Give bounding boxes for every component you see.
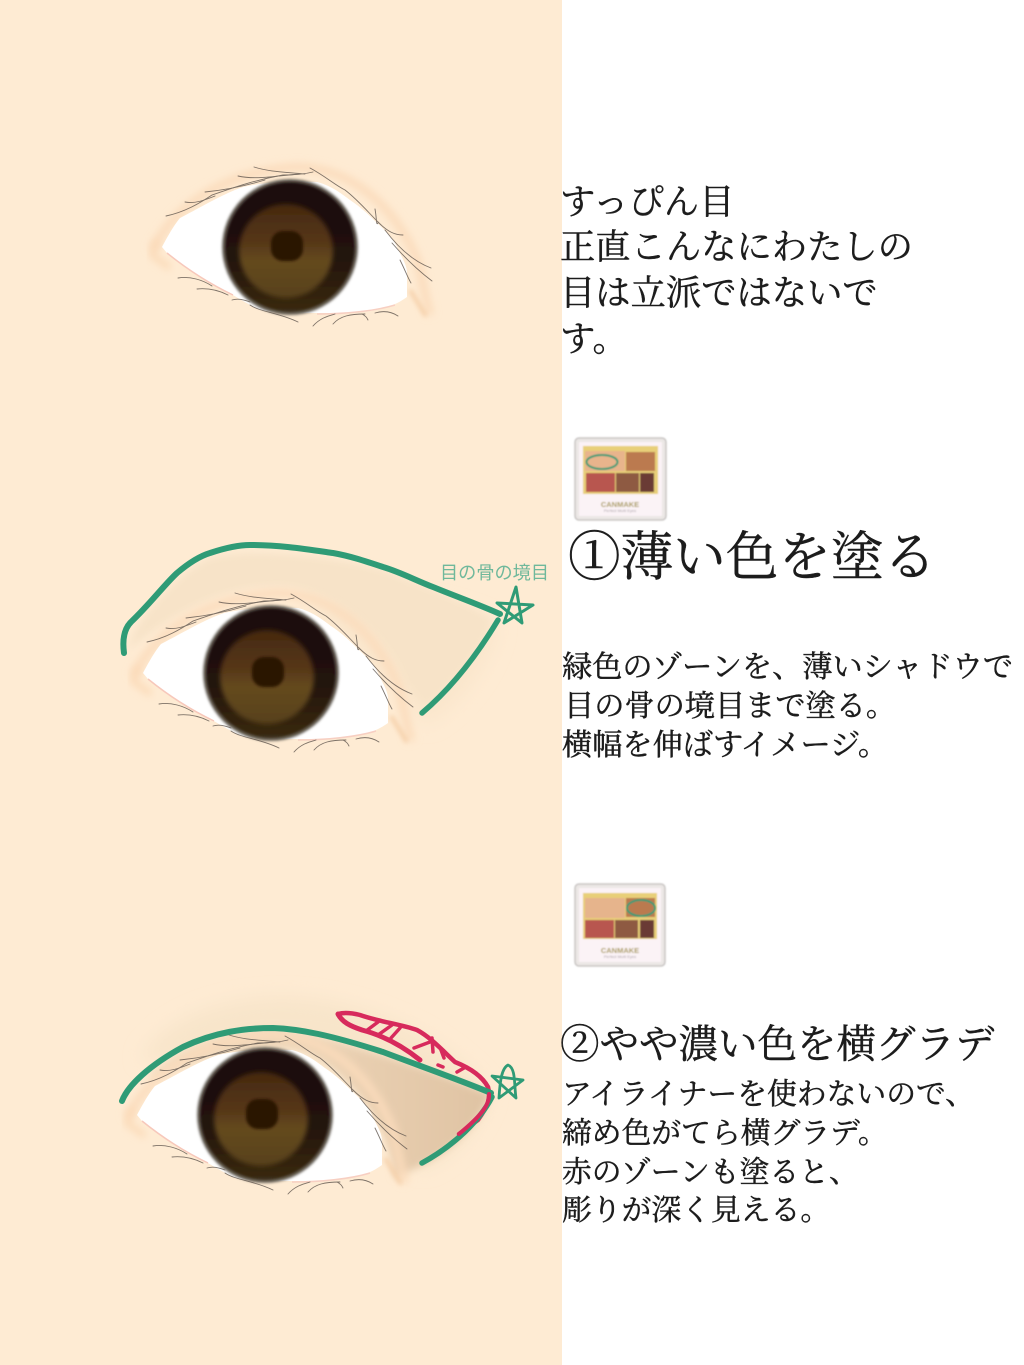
text block: bare eye description: すっぴん目 [560, 183, 734, 222]
green outline: outer lower [422, 1097, 492, 1163]
green circle mark [627, 900, 655, 916]
icon: green star [497, 587, 533, 623]
product name: Perfect Multi Eyes [604, 954, 636, 959]
shadow zone: pale halo [140, 997, 490, 1170]
product name: Perfect Multi Eyes [604, 508, 636, 513]
shadow zone: dark crease [150, 1030, 490, 1178]
text block: step 2 description: 彫りが深く見える。 [562, 1194, 830, 1227]
text block: bare eye description: す。 [560, 320, 628, 359]
icon: green star with loop [492, 1065, 523, 1098]
label: eye bone boundary: 目の骨の境目 [440, 563, 549, 583]
text block: step 1 description [562, 650, 1013, 762]
brand name: CANMAKE [601, 946, 639, 955]
text block: step 2 description [562, 1078, 975, 1227]
heading: step 2: ②やや濃い色を横グラデ [560, 1023, 995, 1067]
text block: bare eye description: 正直こんなにわたしの [560, 228, 913, 267]
palette: step 2 product [575, 884, 665, 966]
text block: step 2 description: 赤のゾーンも塗ると、 [562, 1156, 859, 1189]
red zone: hatching [338, 1013, 489, 1134]
text block: step 1 description: 目の骨の境目まで塗る。 [564, 689, 896, 723]
eye: bare eye [152, 167, 432, 326]
brand name: CANMAKE [601, 500, 639, 509]
text block: step 2 description: 締め色がてら横グラデ。 [562, 1117, 888, 1150]
text block: bare eye description: 目は立派ではないで [560, 274, 878, 313]
red line: outer edge [459, 1094, 489, 1134]
green outline: brow bone [123, 545, 500, 653]
green circle mark [586, 455, 618, 469]
text block: step 2 description: アイライナーを使わないので、 [562, 1078, 975, 1111]
shadow zone: light colour [128, 554, 492, 706]
heading: step 1: ①薄い色を塗る [568, 529, 936, 587]
text block: step 1 description: 緑色のゾーンを、薄いシャドウで [562, 650, 1013, 684]
text block: step 1 description: 横幅を伸ばすイメージ。 [562, 728, 888, 762]
green outline: outer lower [422, 620, 498, 713]
panel: illustration background [0, 0, 562, 1365]
eye: step 1 light shadow [123, 545, 549, 752]
green outline: upper lid [122, 1028, 491, 1101]
eye: step 2 deeper shadow [122, 997, 523, 1194]
text block: bare eye description [560, 183, 913, 359]
shadow zone: soft halo [300, 596, 498, 725]
palette: step 1 product [575, 438, 666, 520]
